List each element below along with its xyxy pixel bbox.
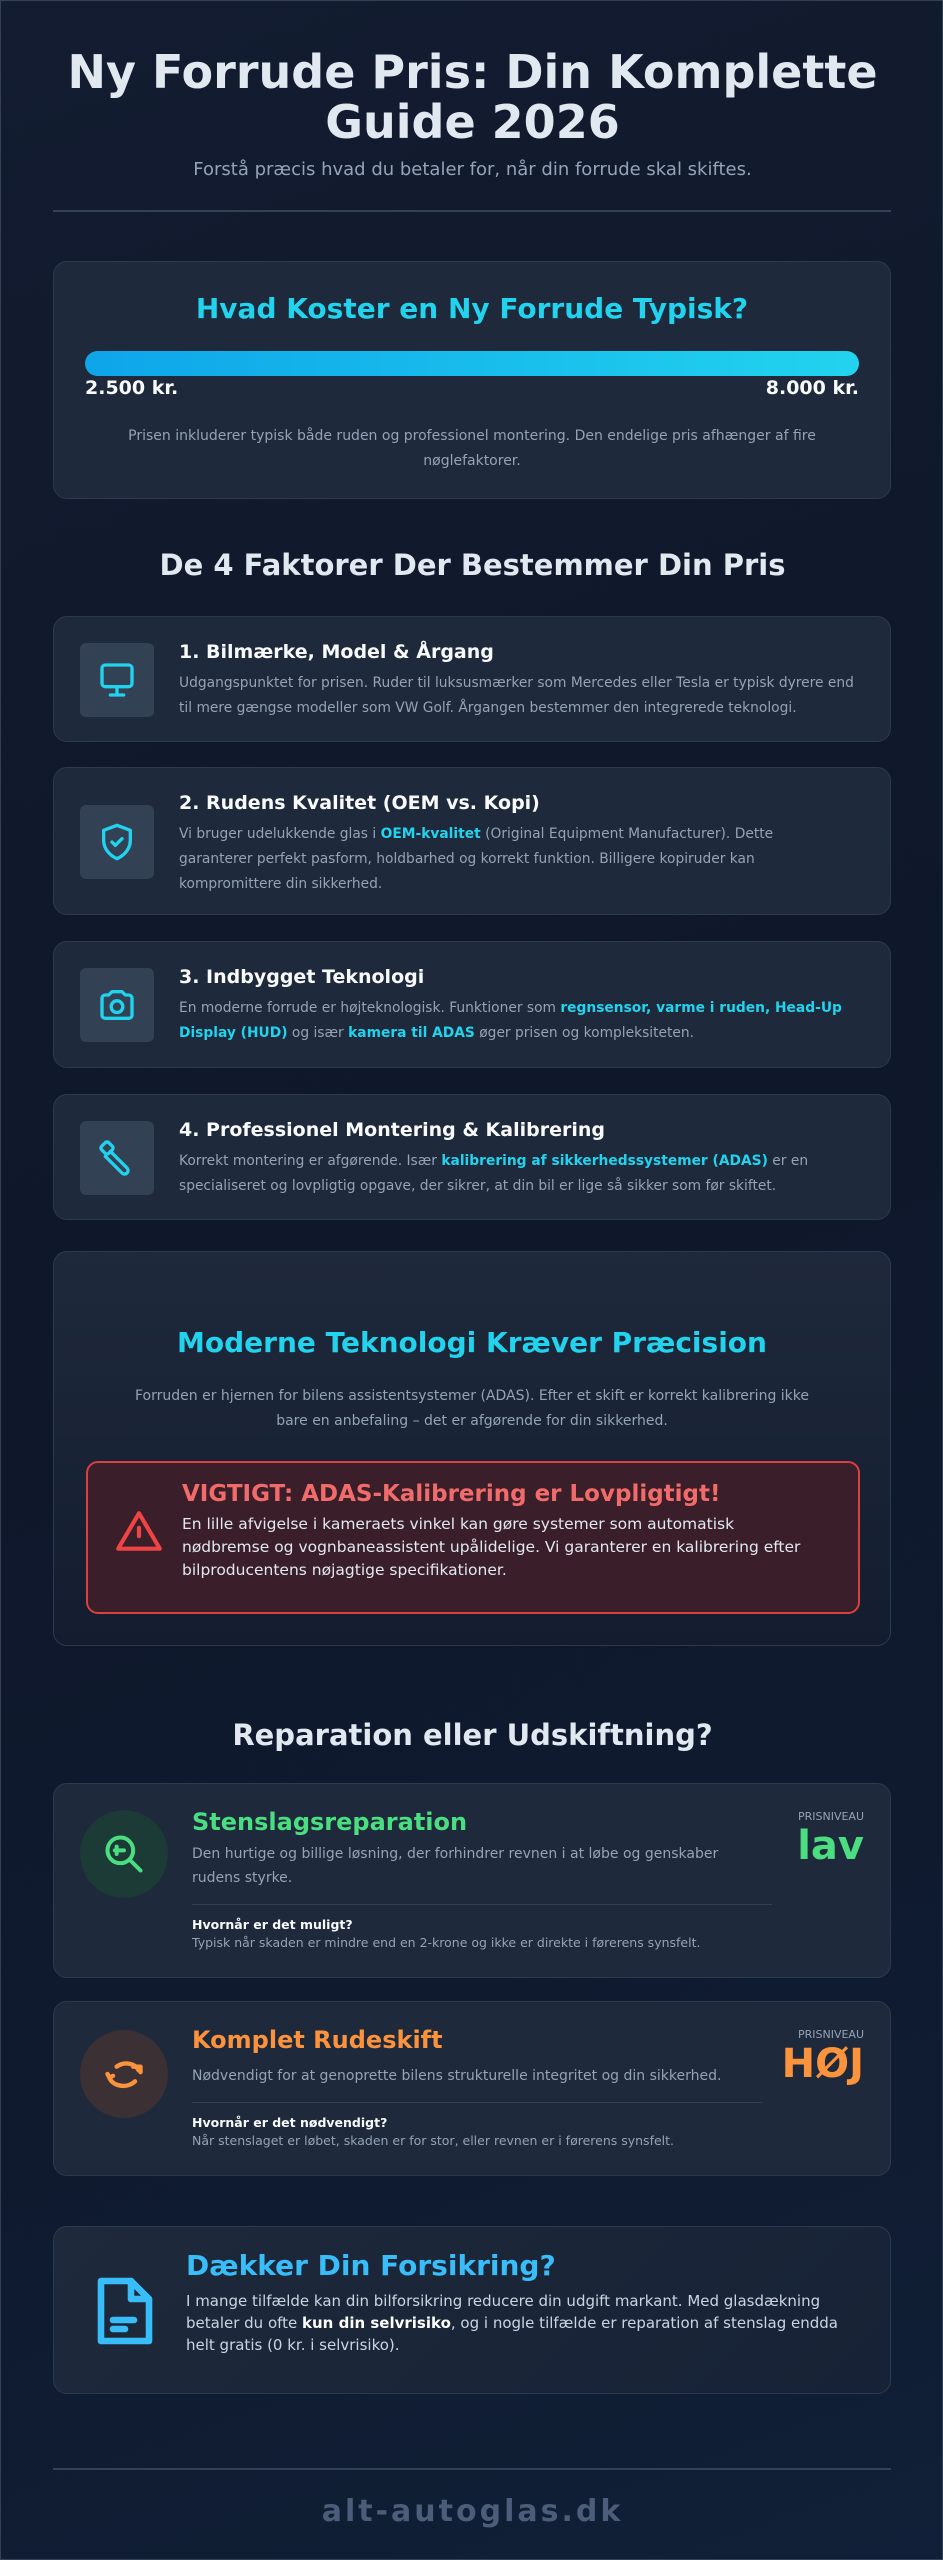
title: Guide 2026	[325, 95, 620, 149]
text: factor 2	[179, 792, 773, 892]
price bar	[85, 351, 859, 376]
panel: replace	[53, 2001, 891, 2176]
callout: warning	[86, 1461, 860, 1614]
icon: tools	[80, 1121, 154, 1195]
title: Ny Forrude Pris: Din Komplette	[67, 45, 878, 99]
panel: factor 3	[53, 941, 891, 1068]
heading: ADAS: Moderne Teknologi Kræver Præcision	[177, 1326, 767, 1359]
text: warning: VIGTIGT: ADAS-Kalibrering er Lovpligtigt!	[182, 1481, 721, 1507]
text: replace	[192, 2026, 762, 2148]
panel: factor 4	[53, 1094, 891, 1220]
price level: high: PRISNIVEAU	[798, 2028, 864, 2041]
note: Prisen inkluderer typisk både ruden og professionel montering. Den endelige pris afhænger af fire nøglefaktorer.	[128, 428, 816, 469]
text: factor 2: 2. Rudens Kvalitet (OEM vs. Kopi)	[179, 792, 540, 814]
text: factor 4: Korrekt montering er afgørende. Især kalibrering af sikkerhedssystemer (ADAS) er en specialiseret og lovpligtig opgave, der sikrer, at din bil er lige så sikker som før skiftet.	[179, 1153, 808, 1194]
icon: monitor	[80, 643, 154, 717]
text: replace: Hvornår er det nødvendigt?	[192, 2115, 387, 2130]
panel: repair	[53, 1783, 891, 1978]
text: warning: En lille afvigelse i kameraets vinkel kan gøre systemer som automatisk nødbremse og vognbaneassistent upålidelige. Vi garanterer en kalibrering efter bilproducentens nøjagtige specifikationer.	[182, 1515, 800, 1579]
subtitle: Forstå præcis hvad du betaler for, når din forrude skal skiftes.	[193, 159, 752, 180]
text: replace: Når stenslaget er løbet, skaden er for stor, eller revnen er i førerens synsfelt.	[192, 2133, 674, 2148]
text: repair	[192, 1808, 772, 1950]
price level: low: lav	[797, 1823, 864, 1869]
panel: insurance	[53, 2226, 891, 2394]
text: insurance	[186, 2249, 838, 2354]
icon: document	[98, 2278, 152, 2344]
text: repair: Typisk når skaden er mindre end en 2-krone og ikke er direkte i førerens synsfelt.	[192, 1935, 700, 1950]
text: factor 4	[179, 1119, 808, 1194]
text: factor 2: Vi bruger udelukkende glas i OEM-kvalitet (Original Equipment Manufacturer). Dette garanterer perfekt pasform, holdbarhed og korrekt funktion. Billigere kopiruder kan kompromittere din sikkerhed.	[179, 826, 773, 892]
text: repair: Hvornår er det muligt?	[192, 1917, 353, 1932]
text: warning	[182, 1481, 800, 1579]
text: repair: Den hurtige og billige løsning, der forhindrer revnen i at løbe og genskaber rudens styrke.	[192, 1846, 718, 1886]
price level: low: PRISNIVEAU	[798, 1810, 864, 1823]
footer: brand: alt-autoglas.dk	[322, 2494, 623, 2529]
text: insurance: I mange tilfælde kan din bilforsikring reducere din udgift markant. Med glasdækning betaler du ofte kun din selvrisiko, og i nogle tilfælde er reparation af stenslag endda helt gratis (0 kr. i selvrisiko).	[186, 2292, 838, 2354]
text: ADAS intro: Forruden er hjernen for bilens assistentsystemer (ADAS). Efter et skift er korrekt kalibrering ikke bare en anbefaling – det er afgørende for din sikkerhed.	[135, 1388, 809, 1429]
text: factor 3	[179, 966, 842, 1041]
title	[67, 45, 878, 149]
heading: factors: De 4 Faktorer Der Bestemmer Din Pris	[160, 548, 785, 582]
heading: repair vs replace: Reparation eller Udskiftning?	[232, 1718, 713, 1752]
panel: factor 1	[53, 616, 891, 742]
label: max price: 8.000 kr.	[766, 377, 859, 399]
icon: magnifier	[80, 1810, 168, 1898]
text: factor 3: En moderne forrude er højteknologisk. Funktioner som regnsensor, varme i ruden, Head-Up Display (HUD) og især kamera til ADAS øger prisen og kompleksiteten.	[179, 1000, 842, 1041]
text: replace: Nødvendigt for at genoprette bilens strukturelle integritet og din sikkerhed.	[192, 2068, 721, 2084]
panel: factor 2	[53, 767, 891, 915]
text: insurance: Dækker Din Forsikring?	[186, 2249, 556, 2282]
icon: warning	[116, 1511, 162, 1551]
text: factor 1: Udgangspunktet for prisen. Ruder til luksusmærker som Mercedes eller Tesla er typisk dyrere end til mere gængse modeller som VW Golf. Årgangen bestemmer den integrerede teknologi.	[179, 675, 854, 716]
icon: swap	[80, 2030, 168, 2118]
label: min price: 2.500 kr.	[85, 377, 178, 399]
icon: camera	[80, 968, 154, 1042]
panel: ADAS	[53, 1251, 891, 1646]
panel: price range	[53, 261, 891, 499]
heading: price: Hvad Koster en Ny Forrude Typisk?	[196, 292, 748, 325]
text: repair: Stenslagsreparation	[192, 1808, 467, 1836]
text: replace: Komplet Rudeskift	[192, 2026, 443, 2054]
text: factor 3: 3. Indbygget Teknologi	[179, 966, 424, 988]
icon: shield	[80, 805, 154, 879]
text: factor 1: 1. Bilmærke, Model & Årgang	[179, 641, 494, 663]
text: factor 1	[179, 640, 854, 716]
text: factor 4: 4. Professionel Montering & Kalibrering	[179, 1119, 605, 1141]
price level: high: HØJ	[782, 2041, 864, 2087]
